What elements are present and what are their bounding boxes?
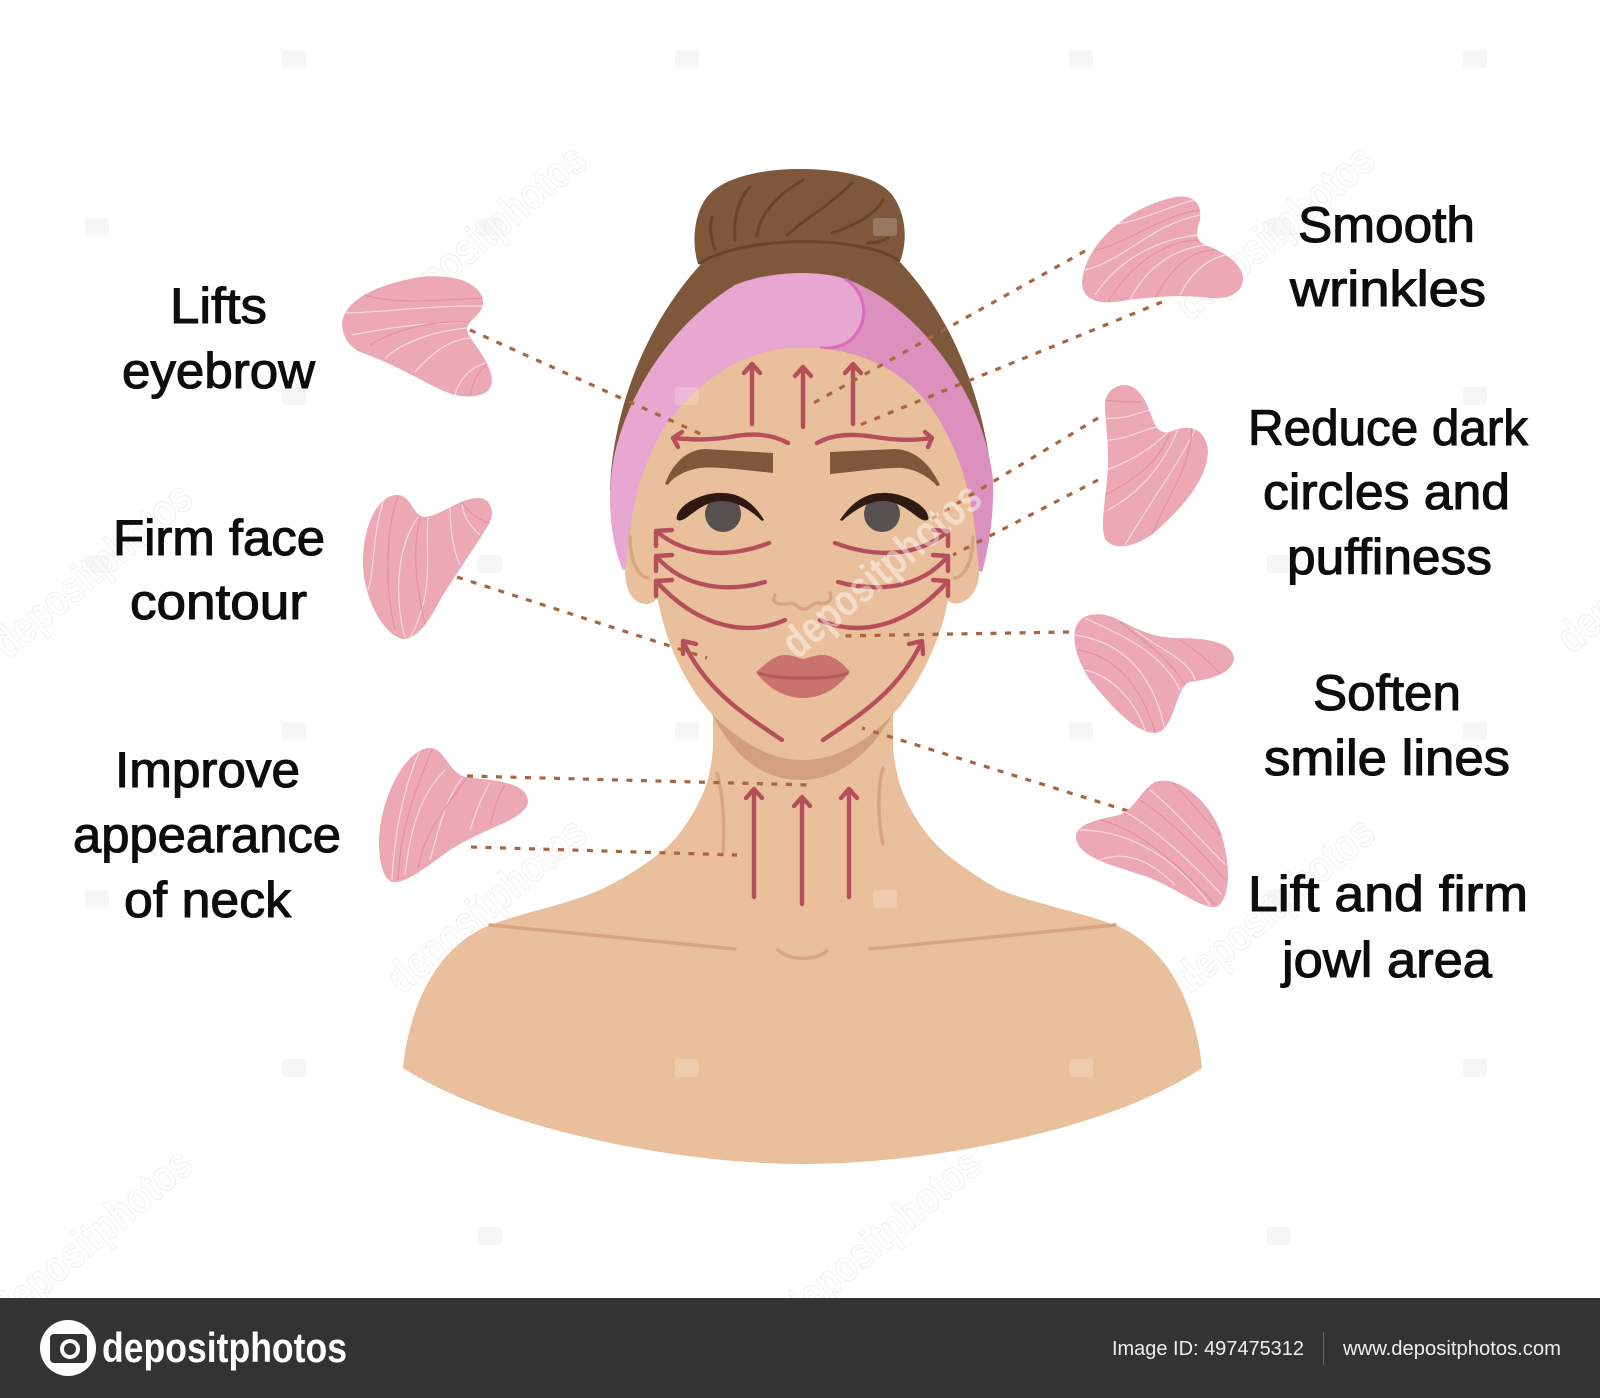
- gua sha stone: smooth wrinkles: [1082, 197, 1243, 302]
- label: reduce dark circles and puffiness: puffiness: [1287, 529, 1492, 585]
- collarbones: [490, 925, 1115, 958]
- label: soften smile lines: [1264, 665, 1510, 786]
- label: soften smile lines: smile lines: [1264, 730, 1510, 786]
- watermark text: depositphotos: [377, 808, 596, 1003]
- nose: [774, 593, 831, 609]
- dotted connector lines: [457, 251, 1162, 855]
- hair: [610, 246, 993, 490]
- watermark text: depositphotos: [377, 135, 596, 330]
- woman's portrait: [403, 169, 1202, 1164]
- gua sha stone: firm face contour: [363, 495, 492, 639]
- neck arrows: [746, 789, 857, 904]
- watermark text: depositphotos: [1165, 135, 1384, 330]
- lips: [756, 655, 850, 698]
- gua sha stone: reduce dark circles: [1103, 385, 1208, 546]
- face: [625, 348, 979, 760]
- label: improve appearance of neck: Improve: [115, 742, 300, 798]
- label: lift and firm jowl area: jowl area: [1280, 932, 1492, 988]
- ear lines: [630, 537, 973, 578]
- footer logo: depositphotos: [102, 1324, 347, 1371]
- label: lifts eyebrow: [122, 278, 316, 399]
- footer bar: [0, 1298, 1600, 1398]
- label: lift and firm jowl area: [1248, 866, 1528, 988]
- hair bun: [695, 169, 905, 264]
- gua sha stone: improve neck: [379, 748, 528, 882]
- headband: [610, 273, 993, 572]
- massage arrows: [656, 364, 948, 904]
- footer logo: [40, 1320, 347, 1376]
- gua sha stone: lifts eyebrow: [342, 276, 492, 397]
- gua sha stone: soften smile lines: [1074, 614, 1234, 733]
- body: neck and shoulders: [403, 690, 1202, 1164]
- label: reduce dark circles and puffiness: circles and: [1263, 464, 1510, 520]
- watermark camera icons over portrait: [478, 218, 1093, 1077]
- label: lifts eyebrow: eyebrow: [122, 343, 316, 399]
- label: lifts eyebrow: Lifts: [170, 278, 267, 334]
- neck wrinkles: [717, 768, 883, 853]
- watermark camera icons: [85, 50, 1487, 1245]
- label: smooth wrinkles: [1289, 197, 1486, 317]
- eyes: [677, 493, 928, 532]
- eyebrows: [665, 449, 940, 486]
- website: www.depositphotos.com: [1342, 1338, 1561, 1360]
- label: reduce dark circles and puffiness: [1248, 400, 1529, 585]
- chin shadow: [711, 700, 896, 780]
- label: improve appearance of neck: [73, 742, 341, 928]
- watermark text: depositphotos: [1165, 808, 1384, 1003]
- jaw arrows: [683, 641, 923, 740]
- label: smooth wrinkles: Smooth: [1298, 197, 1475, 253]
- label: firm face contour: contour: [130, 574, 307, 630]
- label: firm face contour: [113, 510, 325, 630]
- label: improve appearance of neck: of neck: [124, 872, 292, 928]
- watermark text: depositphotos: [772, 1139, 991, 1334]
- forehead up arrows: [744, 364, 861, 427]
- label: firm face contour: Firm face: [113, 510, 325, 566]
- label: lift and firm jowl area: Lift and firm: [1248, 866, 1528, 922]
- brow arrows: [673, 432, 932, 447]
- label: improve appearance of neck: appearance: [73, 807, 341, 863]
- watermark over face: depositphotos: [772, 473, 991, 668]
- label: soften smile lines: Soften: [1313, 665, 1461, 721]
- image id: Image ID: 497475312: [1112, 1338, 1304, 1360]
- under-eye and cheek arrows: [656, 530, 948, 628]
- gua sha stone: lift jowl area: [1076, 780, 1228, 907]
- label: smooth wrinkles: wrinkles: [1289, 261, 1486, 317]
- label: reduce dark circles and puffiness: Reduce dark: [1248, 400, 1529, 456]
